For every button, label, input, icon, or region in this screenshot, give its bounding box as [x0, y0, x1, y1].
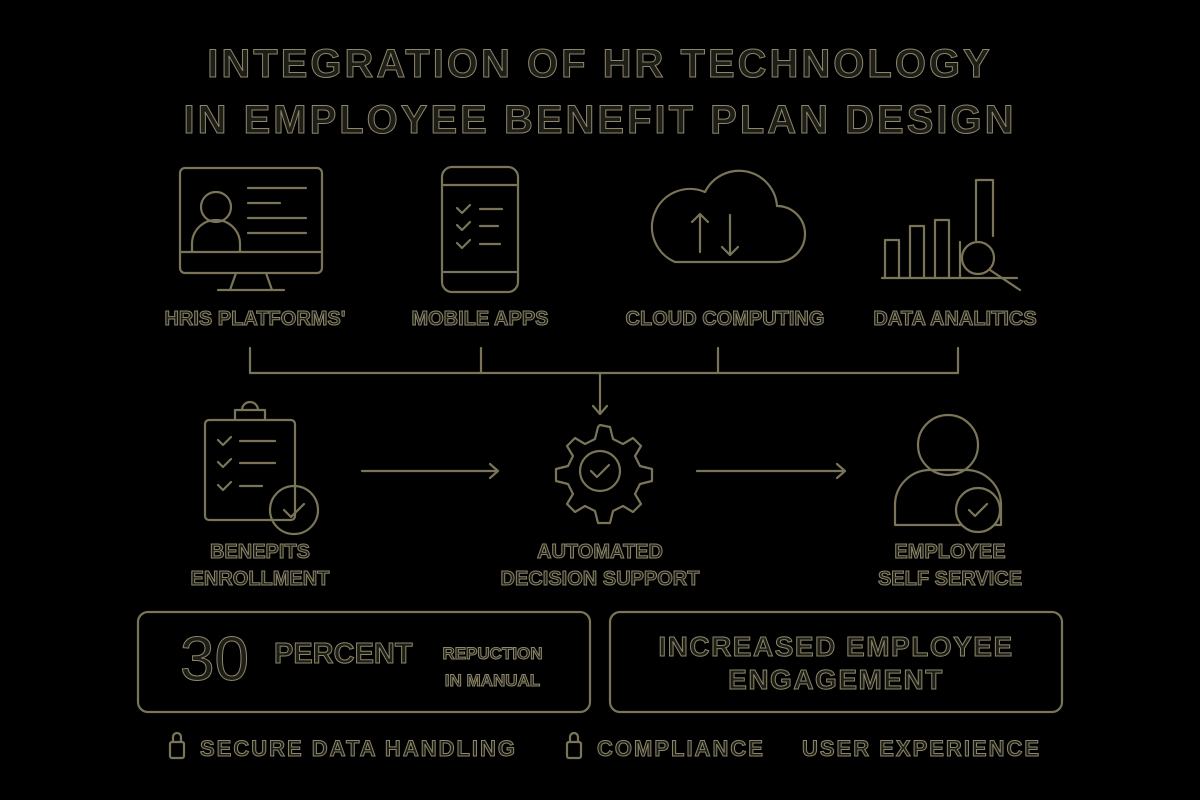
label: enrollment	[191, 541, 330, 590]
label: self service	[878, 541, 1022, 590]
icon: clipboard	[205, 402, 318, 534]
label: self service: EMPLOYEE	[894, 541, 1006, 563]
label: decision: DECISION SUPPORT	[501, 568, 699, 590]
stat: reduction: REPUCTION	[442, 644, 543, 663]
connector lines	[250, 348, 958, 414]
icon: cloud	[652, 171, 805, 262]
stat boxes	[138, 612, 1062, 712]
title: IN EMPLOYEE BENEFIT PLAN DESIGN	[183, 98, 1017, 142]
label: enrollment: ENROLLMENT	[191, 568, 329, 590]
title	[183, 42, 1017, 142]
stat: engagement: INCREASED EMPLOYEE	[658, 631, 1014, 662]
label: mobile: MOBILE APPS	[411, 308, 549, 330]
footer: secure: SECURE DATA HANDLING	[200, 736, 517, 761]
icon: chart	[882, 180, 1020, 290]
arrow 2	[697, 464, 845, 478]
title: INTEGRATION OF HR TECHNOLOGY	[207, 42, 993, 86]
icon: phone	[442, 167, 518, 292]
stat: reduction: IN MANUAL	[445, 671, 540, 690]
icon: monitor	[180, 168, 322, 290]
icon: gear	[556, 425, 652, 523]
stat: 30 percent: 30	[180, 625, 249, 694]
icon: person	[895, 415, 1001, 532]
label: enrollment: BENEPITS	[210, 541, 310, 563]
label: self service: SELF SERVICE	[878, 568, 1022, 590]
label: cloud: CLOUD COMPUTING	[626, 308, 824, 330]
stat: percent word: PERCENT	[274, 638, 413, 670]
footer: compliance: COMPLIANCE	[597, 736, 765, 761]
label: decision	[501, 541, 700, 590]
label: decision: AUTOMATED	[537, 541, 663, 563]
arrow 1	[362, 464, 498, 478]
label: HRIS: HRIS PLATFORMS'	[164, 308, 346, 330]
stat: reduction	[442, 644, 543, 690]
stat: engagement: ENGAGEMENT	[728, 664, 944, 695]
stat: engagement	[658, 631, 1014, 695]
footer: user experience: USER EXPERIENCE	[802, 736, 1041, 761]
label: analytics: DATA ANALITICS	[873, 308, 1037, 330]
icon: locks	[170, 733, 581, 758]
